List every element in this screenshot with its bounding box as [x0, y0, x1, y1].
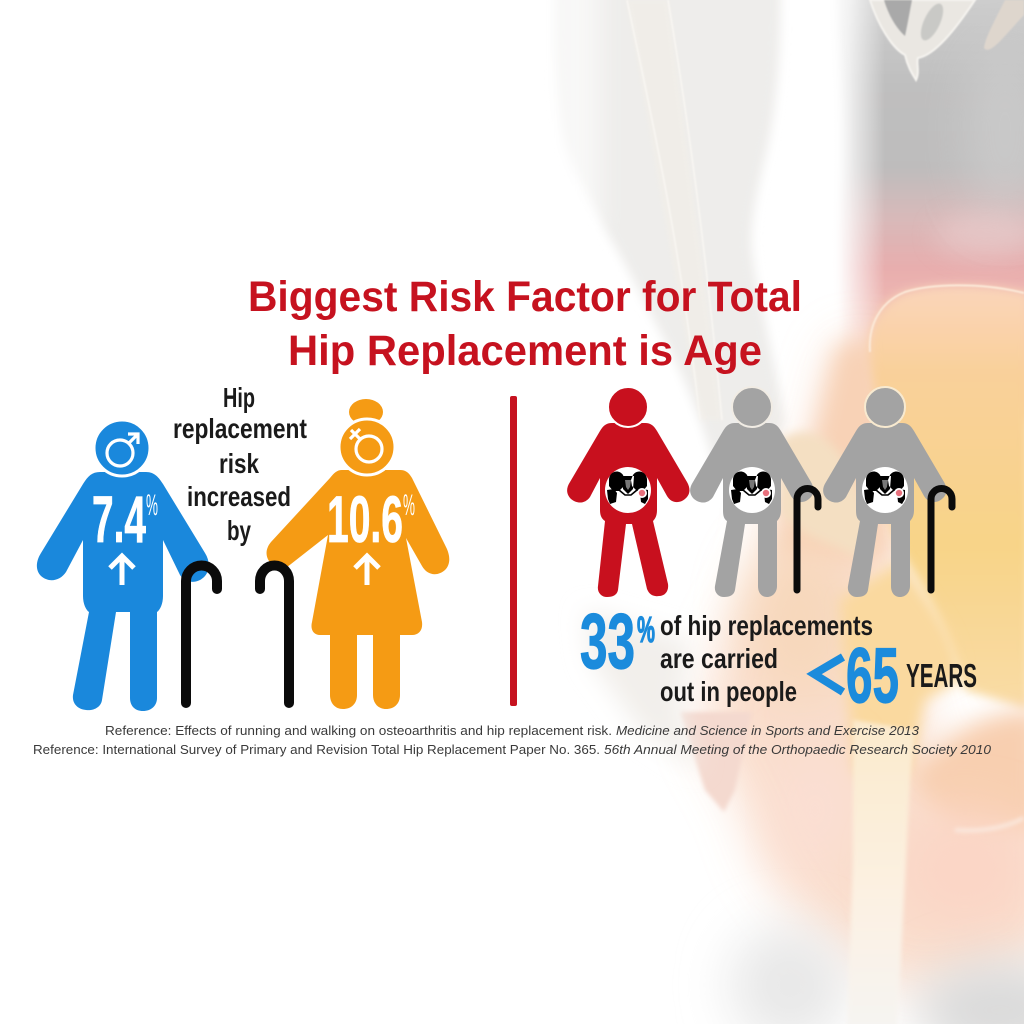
male figure: 7.4%: [37, 420, 209, 711]
references: Medicine and Science in Sports and Exercise 2013: [616, 724, 919, 738]
grey pelvis icon 2: [864, 472, 905, 504]
rib inner: [916, 0, 948, 44]
grey hip circle 1: [729, 467, 775, 513]
centre label: hip replacement risk increased by: by: [227, 515, 251, 546]
references: 56th Annual Meeting of the Orthopaedic Research Society 2010: [604, 743, 991, 757]
rib gap: [884, 0, 912, 36]
statistic description: are carried: [660, 643, 778, 674]
cane for grey figure 2: [931, 489, 952, 590]
centre label: hip replacement risk increased by: replacement: [173, 413, 307, 444]
thigh white curve: [955, 818, 1024, 830]
femoral head and neck: [840, 560, 960, 775]
arm fade left: [530, 0, 600, 230]
female cane: [260, 566, 289, 703]
hip joint knot: [780, 432, 871, 560]
female body: [267, 470, 449, 709]
female symbol: [350, 429, 382, 462]
grey head 1: [732, 387, 772, 427]
red figure: [567, 387, 689, 597]
arm bone: [627, 0, 722, 420]
red body: [567, 423, 689, 597]
red pelvis icon: [607, 472, 648, 504]
arm bone outline: [627, 0, 722, 420]
divider line: [510, 396, 517, 706]
torso: [833, 0, 1024, 420]
statistic: under 65 years: 65: [846, 631, 899, 719]
references: [33, 724, 991, 757]
leg grey left bottom: [730, 925, 850, 1024]
torso left fade: [822, 0, 885, 420]
leg grey right bottom: [915, 960, 1024, 1024]
female head: [339, 419, 395, 475]
grey body 2: [823, 423, 946, 597]
centre label: hip replacement risk increased by: risk: [219, 448, 259, 479]
cane for grey figure 1: [797, 489, 818, 590]
statistic description: out in people: [660, 676, 797, 707]
statistic: under 65 years: [814, 631, 977, 719]
centre label: hip replacement risk increased by: increased: [187, 481, 291, 512]
red hip circle: [605, 467, 651, 513]
upper peach beside pelvis: [775, 340, 890, 560]
references: Reference: Effects of running and walking on osteoarthritis and hip replacement risk.: [105, 724, 612, 738]
grey figure 2: [823, 387, 946, 597]
grey head 2: [865, 387, 905, 427]
male up arrow: [110, 556, 134, 585]
female figure: 10.6%: %: [403, 489, 415, 522]
references: Reference: International Survey of Primary and Revision Total Hip Replacement Paper No. 365.: [33, 743, 600, 757]
statistic description: [660, 610, 873, 707]
pelvic wing outline: [870, 285, 1024, 352]
male cane: [186, 566, 217, 703]
right thigh orange: [910, 710, 1024, 830]
grey hip circle 2: [862, 467, 908, 513]
torso highlight right: [965, 40, 1024, 220]
title: [248, 273, 802, 375]
statistic: 33%: %: [637, 609, 655, 650]
female up arrow: [355, 556, 379, 585]
male symbol: [107, 434, 138, 466]
male body: [37, 472, 209, 711]
statistic: 33%: 33: [580, 597, 635, 685]
male head: [94, 420, 150, 476]
iliac wing: [870, 285, 1024, 710]
female figure: 10.6%: [267, 399, 449, 709]
statistic: under 65 years: YEARS: [906, 657, 977, 694]
ribs: [870, 0, 975, 80]
pink left of femur: [780, 750, 850, 870]
pale grey left lower: [585, 610, 700, 770]
centre label: hip replacement risk increased by: Hip: [223, 382, 255, 413]
pale pink right: [935, 213, 1024, 257]
hip peach glow: [745, 540, 855, 700]
male percentage: 7.4: [92, 482, 146, 556]
grey pelvis icon 1: [731, 472, 772, 504]
female percentage: 10.6: [327, 482, 403, 556]
title: Hip Replacement is Age: [288, 327, 762, 375]
second rib: [984, 0, 1024, 50]
centre label: hip replacement risk increased by: [173, 382, 307, 546]
red head: [608, 387, 648, 427]
arm soft tissue: [554, 0, 785, 470]
female bun: [349, 399, 383, 425]
background: blurred anatomical hip illustration: [530, 0, 1024, 1024]
hand fingers: [680, 712, 752, 812]
lower peach body beside pelvis: [700, 340, 1024, 990]
male figure: 7.4%: %: [146, 489, 158, 522]
grey figure 1: [690, 387, 813, 597]
grey body 1: [690, 423, 813, 597]
right thigh pink: [895, 810, 1024, 930]
femur shaft: [847, 720, 915, 1024]
title: Biggest Risk Factor for Total: [248, 273, 802, 321]
statistic description: of hip replacements: [660, 610, 873, 641]
